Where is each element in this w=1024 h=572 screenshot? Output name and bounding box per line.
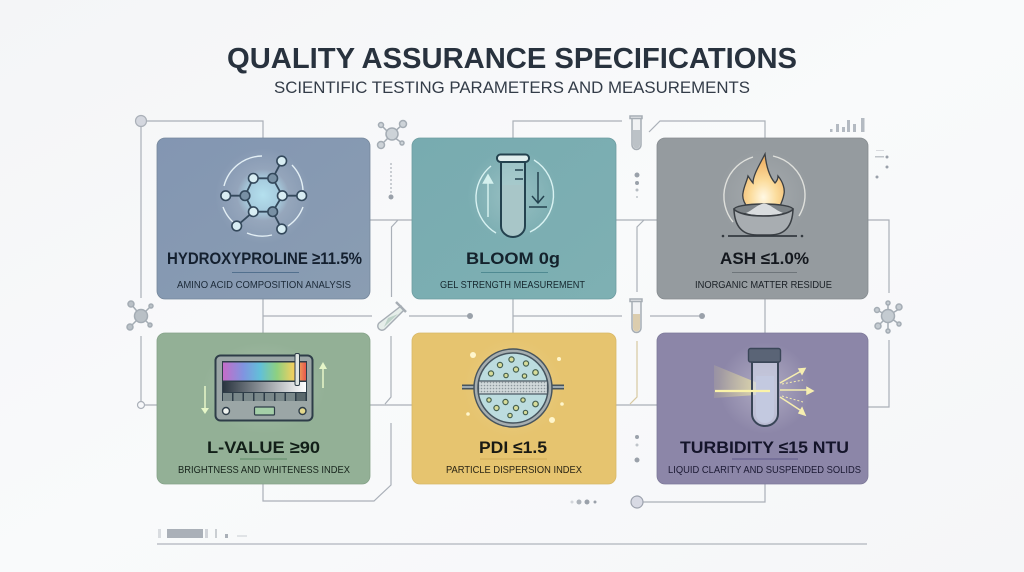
- icon: filter membrane: [462, 338, 564, 438]
- panel: pdi: [412, 333, 616, 484]
- icon: tube with light scatter: [714, 342, 813, 434]
- icon: test tube top: [630, 116, 642, 150]
- node: top-left connector: [136, 116, 146, 126]
- node: bottom connector: [631, 496, 643, 508]
- panel: bloom: [412, 138, 616, 299]
- decorative dots: [388, 150, 888, 504]
- caption: BRIGHTNESS AND WHITENESS INDEX: [178, 464, 350, 476]
- icon: colorimeter: [201, 342, 327, 434]
- heading: ASH ≤1.0%: [720, 249, 809, 268]
- heading: BLOOM 0g: [466, 249, 560, 268]
- heading: L-VALUE ≥90: [207, 438, 320, 457]
- connector lines: [141, 121, 889, 544]
- caption: INORGANIC MATTER RESIDUE: [695, 279, 832, 291]
- title: QUALITY ASSURANCE SPECIFICATIONS: [227, 43, 797, 75]
- icon: molecule left: [127, 301, 153, 330]
- icon: molecule top: [378, 120, 406, 148]
- caption: AMINO ACID COMPOSITION ANALYSIS: [177, 279, 351, 291]
- icon: molecule: [215, 148, 311, 244]
- node: left connector: [138, 402, 144, 408]
- panel: l-value: [157, 333, 370, 484]
- caption: LIQUID CLARITY AND SUSPENDED SOLIDS: [668, 464, 861, 476]
- footer bar marks: [158, 529, 247, 538]
- panel: hydroxyproline: [157, 138, 370, 299]
- caption: GEL STRENGTH MEASUREMENT: [440, 279, 586, 291]
- icon: test tube: [467, 149, 559, 241]
- panel: ash: [657, 138, 868, 299]
- subtitle: SCIENTIFIC TESTING PARAMETERS AND MEASUREMENTS: [274, 78, 750, 97]
- heading: PDI ≤1.5: [479, 438, 547, 457]
- heading: HYDROXYPROLINE ≥11.5%: [167, 249, 362, 268]
- icon: test tube diagonal: [378, 302, 406, 330]
- decorative bar chart: [830, 118, 864, 132]
- panel: turbidity: [657, 333, 868, 484]
- icon: test tube lower: [630, 299, 642, 333]
- icon: molecule right: [874, 301, 902, 333]
- caption: PARTICLE DISPERSION INDEX: [446, 464, 582, 476]
- heading: TURBIDITY ≤15 NTU: [680, 438, 849, 457]
- icon: flame and bowl: [718, 149, 810, 241]
